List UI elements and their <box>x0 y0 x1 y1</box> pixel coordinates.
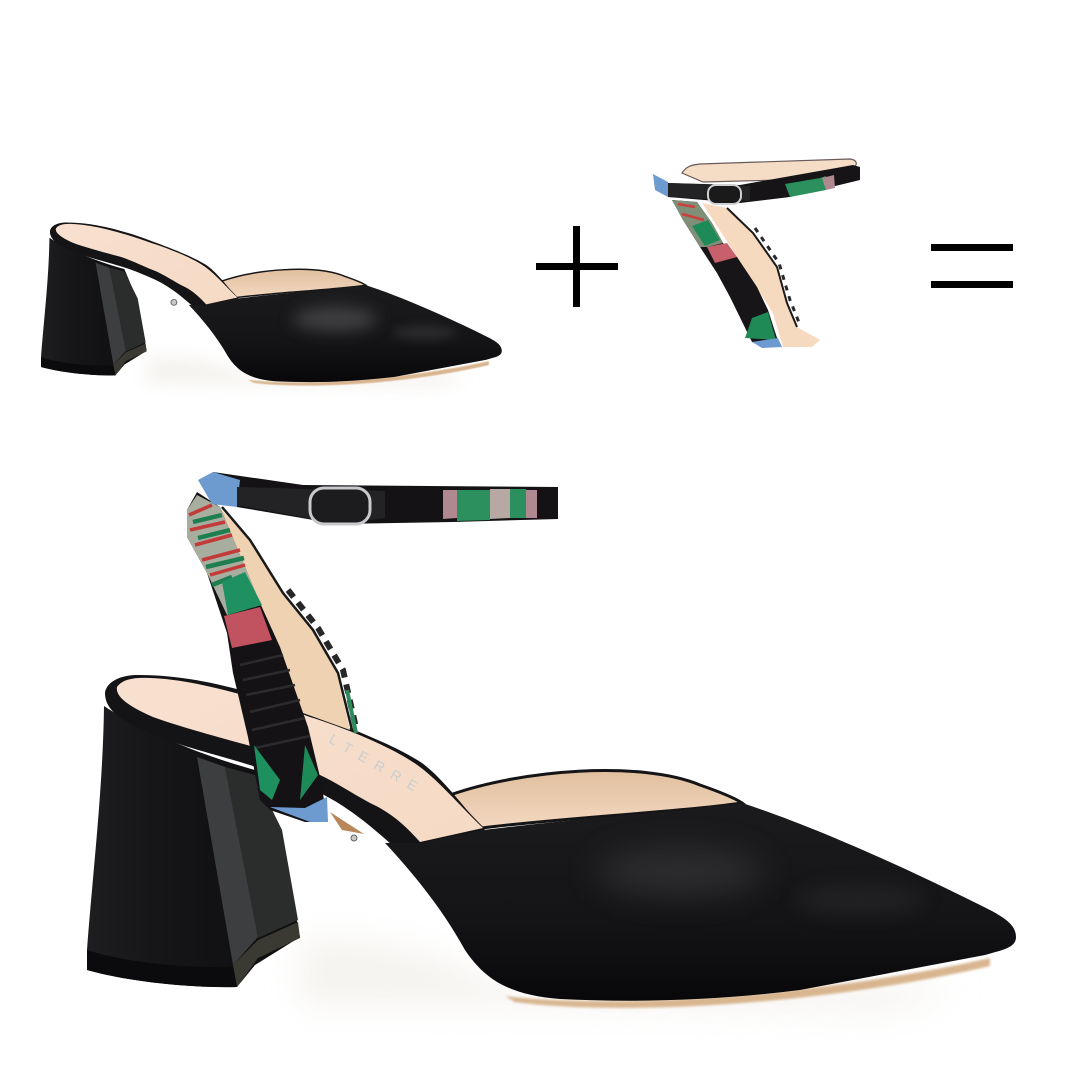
strap lining <box>220 508 350 730</box>
inner lining <box>450 771 742 828</box>
black rim <box>105 675 486 850</box>
small black mule shoe <box>41 222 502 388</box>
block heel <box>87 706 300 987</box>
detachable ankle strap, small <box>653 159 860 348</box>
large assembled shoe with strap <box>87 472 1016 1012</box>
ankle strap <box>198 472 558 524</box>
strap band, small <box>668 165 860 203</box>
buckle <box>310 488 370 524</box>
strap inner lining, small <box>682 159 856 182</box>
sole edge <box>505 958 990 1008</box>
leather vamp <box>385 803 1016 1001</box>
floor shadow <box>300 938 960 1012</box>
strap peach stem, small <box>702 203 820 347</box>
equals sign <box>931 244 1013 288</box>
strap stem fabric <box>187 492 328 822</box>
insole with brand: LTERRE <box>326 731 428 799</box>
plus sign <box>536 226 618 307</box>
strap stem fabric, small <box>672 200 778 342</box>
insole with brand <box>117 678 483 842</box>
hardware under strap <box>330 812 364 841</box>
